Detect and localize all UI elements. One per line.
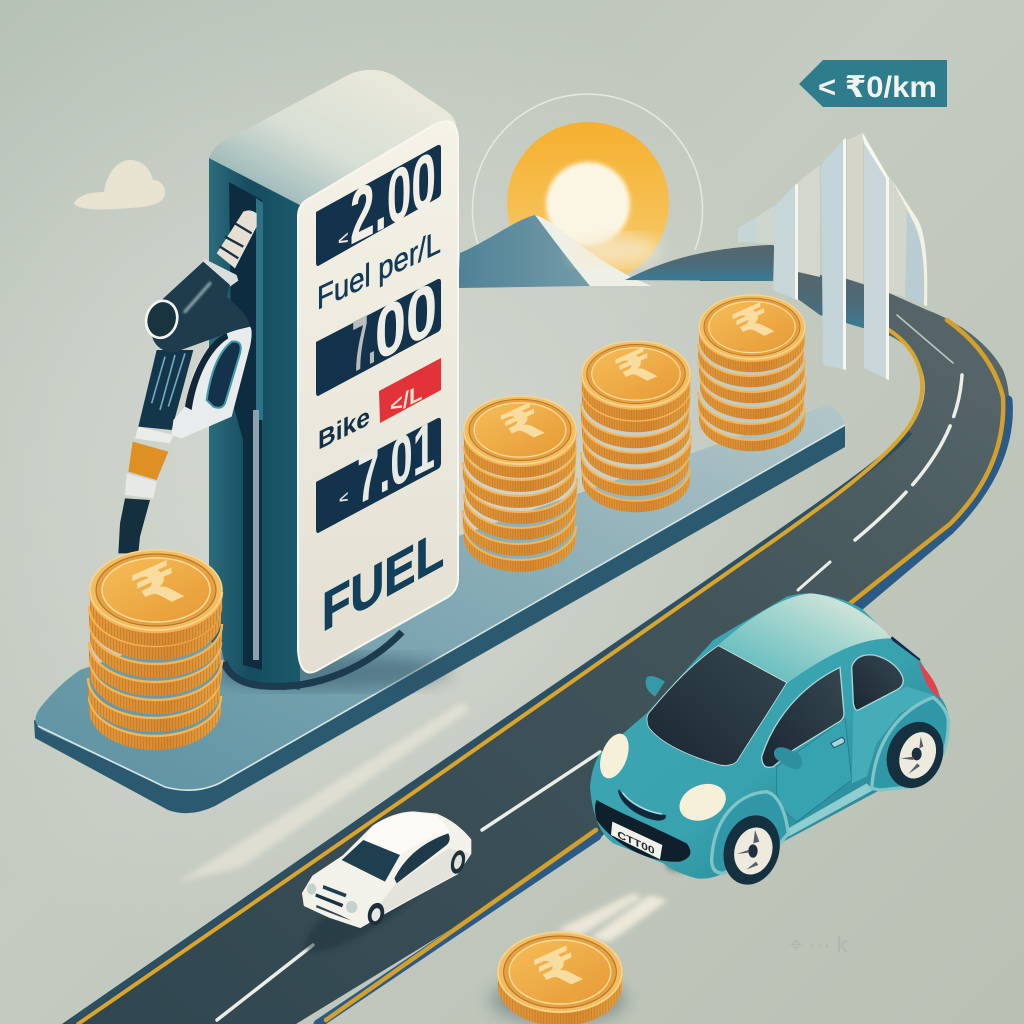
license plate: CTT00 xyxy=(617,829,655,857)
price-per-km sign xyxy=(799,60,947,107)
tail light xyxy=(918,662,940,698)
white car xyxy=(295,813,470,965)
pump side xyxy=(209,158,300,690)
road xyxy=(62,245,1009,1024)
red price tag xyxy=(379,358,441,423)
nozzle slot xyxy=(229,182,262,670)
side window xyxy=(762,667,844,767)
lane dashes xyxy=(217,315,962,1020)
sun with halo arc xyxy=(472,94,702,284)
price-per-km sign: < ₹0/km xyxy=(818,71,937,104)
display 2: 7. xyxy=(352,295,376,390)
front wheel xyxy=(715,808,789,892)
hose at pump base xyxy=(224,632,402,686)
display 1 xyxy=(316,135,441,266)
hills xyxy=(458,215,660,288)
label: FUEL: FUEL xyxy=(322,517,444,644)
roof xyxy=(718,593,892,683)
light trails xyxy=(178,702,668,942)
label: Bike: Bike xyxy=(318,400,370,456)
display 2 xyxy=(316,265,441,396)
faint watermark: ⌖ ··· k xyxy=(790,932,849,957)
wheel arches xyxy=(712,792,788,873)
coin stack 4 xyxy=(698,295,806,451)
ground coin: ₹ xyxy=(524,937,597,1004)
ground coin xyxy=(490,932,626,1024)
door handle xyxy=(831,737,845,748)
left mirror xyxy=(646,676,665,697)
coin stack 2: ₹ xyxy=(492,395,557,455)
red price tag: </L xyxy=(390,379,422,420)
headlights xyxy=(594,730,634,782)
front panel xyxy=(298,121,458,673)
rear dark edge xyxy=(892,637,920,660)
grille xyxy=(595,800,690,862)
coin stack 4: ₹ xyxy=(724,295,786,352)
roadside panels xyxy=(738,132,927,380)
display 1: < xyxy=(338,228,349,253)
coin stack 1 xyxy=(88,550,222,750)
license plate xyxy=(611,822,662,859)
coin stack 1: ₹ xyxy=(122,551,199,622)
platform xyxy=(34,405,845,813)
right mirror xyxy=(774,747,802,769)
windshield xyxy=(647,646,787,765)
coin stack 3: ₹ xyxy=(607,340,669,397)
body xyxy=(590,593,949,879)
label: Fuel per/L: Fuel per/L xyxy=(317,222,441,317)
coin stack 2 xyxy=(463,395,577,572)
fuel pump xyxy=(209,70,458,690)
rear window xyxy=(852,655,903,710)
display 1: 2.00 xyxy=(350,135,436,262)
coin stack 3 xyxy=(581,340,691,512)
far road section behind panels xyxy=(625,245,773,281)
teal car xyxy=(590,593,953,892)
display 3 xyxy=(316,407,441,533)
rear wheel xyxy=(877,713,953,797)
display 3: 7.01 xyxy=(357,407,435,520)
door panel xyxy=(777,718,852,822)
display 2: 00 xyxy=(375,265,437,379)
yellow edge lines xyxy=(78,320,1008,1024)
rear quarter xyxy=(852,687,933,783)
door sill xyxy=(788,783,873,837)
cloud xyxy=(74,160,165,209)
display 3: < xyxy=(339,487,348,510)
fuel nozzle and hose xyxy=(118,210,257,553)
pump top xyxy=(209,70,456,206)
nozzle cap xyxy=(142,297,181,341)
